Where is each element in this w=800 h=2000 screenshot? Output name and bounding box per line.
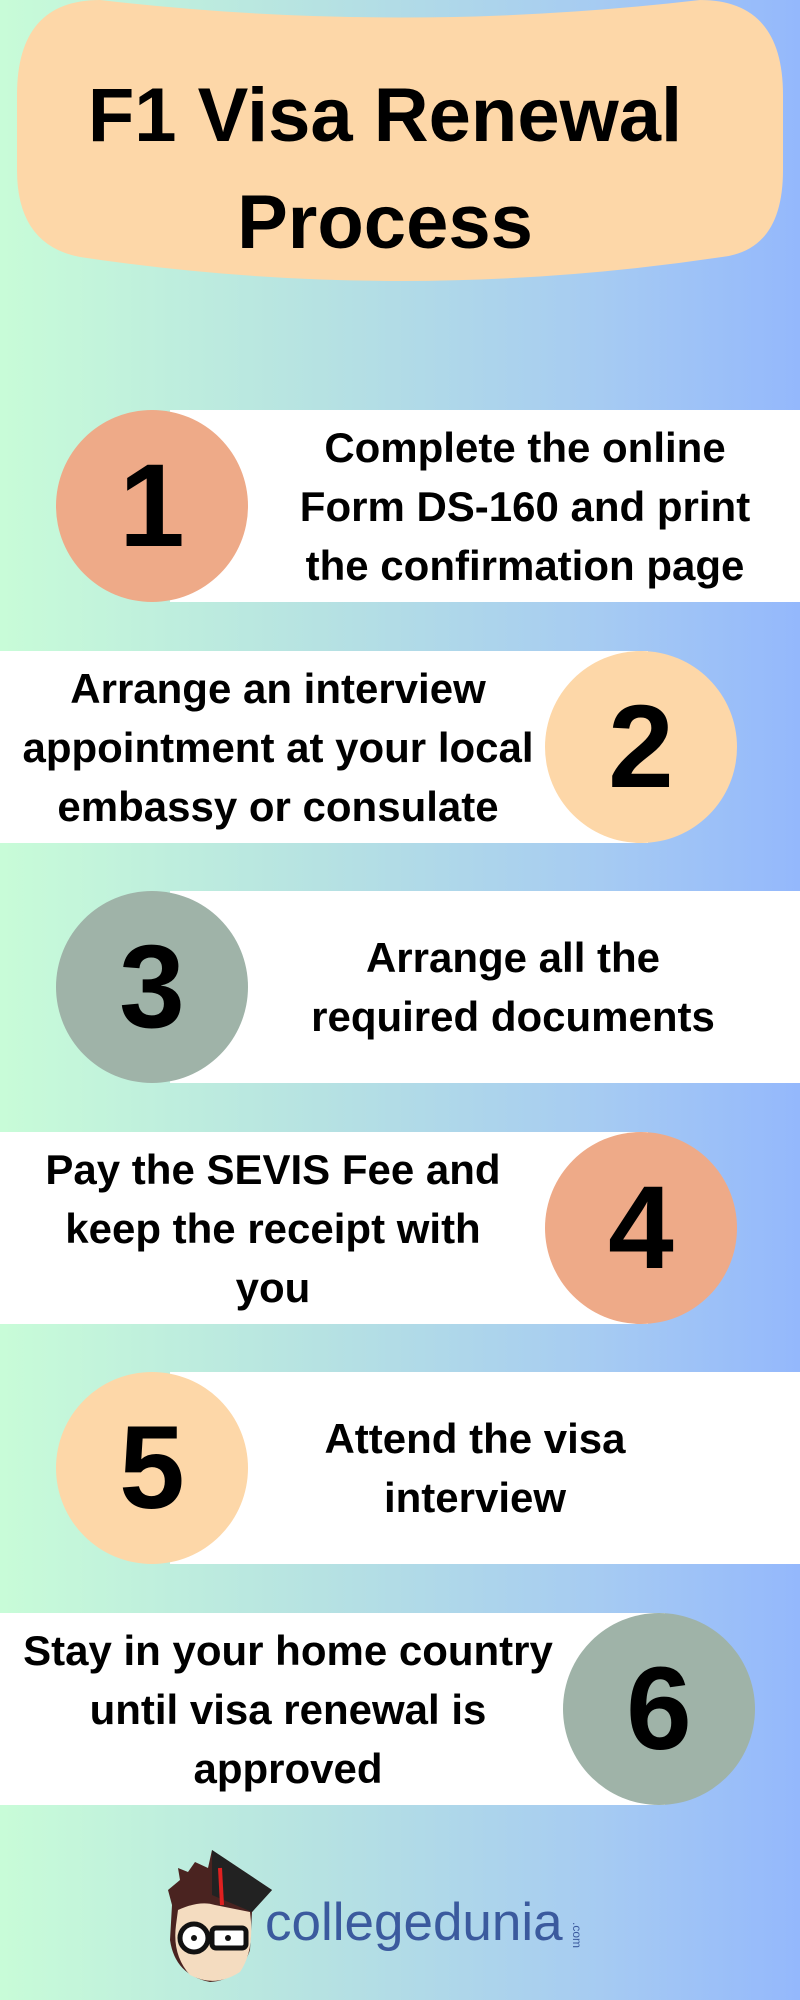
step 4: keep the receipt with bbox=[65, 1204, 481, 1252]
logo text: collegedunia bbox=[265, 1893, 563, 1952]
step 3: required documents bbox=[311, 993, 715, 1040]
step 2: embassy or consulate bbox=[57, 782, 499, 830]
step 1: 1 bbox=[119, 440, 185, 572]
step 3: Arrange all the bbox=[366, 934, 660, 981]
step 6 bbox=[0, 1613, 755, 1805]
step 5: interview bbox=[384, 1474, 566, 1521]
title bbox=[17, 0, 783, 281]
step 4: 4 bbox=[608, 1162, 674, 1294]
step 4 bbox=[0, 1132, 737, 1324]
step 4: you bbox=[236, 1264, 310, 1310]
step 3: 3 bbox=[119, 921, 185, 1053]
step 2: Arrange an interview bbox=[70, 664, 486, 712]
step 2 bbox=[0, 651, 737, 843]
step 6: until visa renewal is bbox=[90, 1686, 486, 1732]
title: F1 Visa Renewal bbox=[88, 73, 682, 158]
step 2: 2 bbox=[608, 681, 674, 813]
icon: student face bbox=[168, 1850, 272, 1982]
step 1: the confirmation page bbox=[306, 542, 744, 588]
step 5: 5 bbox=[119, 1402, 185, 1534]
step 1: Complete the online bbox=[324, 424, 726, 470]
step 6: Stay in your home country bbox=[23, 1626, 553, 1674]
step 6: approved bbox=[193, 1744, 383, 1792]
step 5 bbox=[56, 1372, 800, 1564]
step 3 bbox=[56, 891, 800, 1083]
title: Process bbox=[237, 180, 533, 265]
step 1: Form DS-160 and print bbox=[300, 482, 750, 530]
step 1 bbox=[56, 410, 800, 602]
step 2: appointment at your local bbox=[22, 724, 534, 770]
step 6: 6 bbox=[626, 1643, 692, 1775]
step 5: Attend the visa bbox=[324, 1415, 626, 1462]
step 4: Pay the SEVIS Fee and bbox=[45, 1146, 501, 1192]
logo bbox=[168, 1850, 584, 1982]
logo: .com bbox=[570, 1922, 584, 1948]
